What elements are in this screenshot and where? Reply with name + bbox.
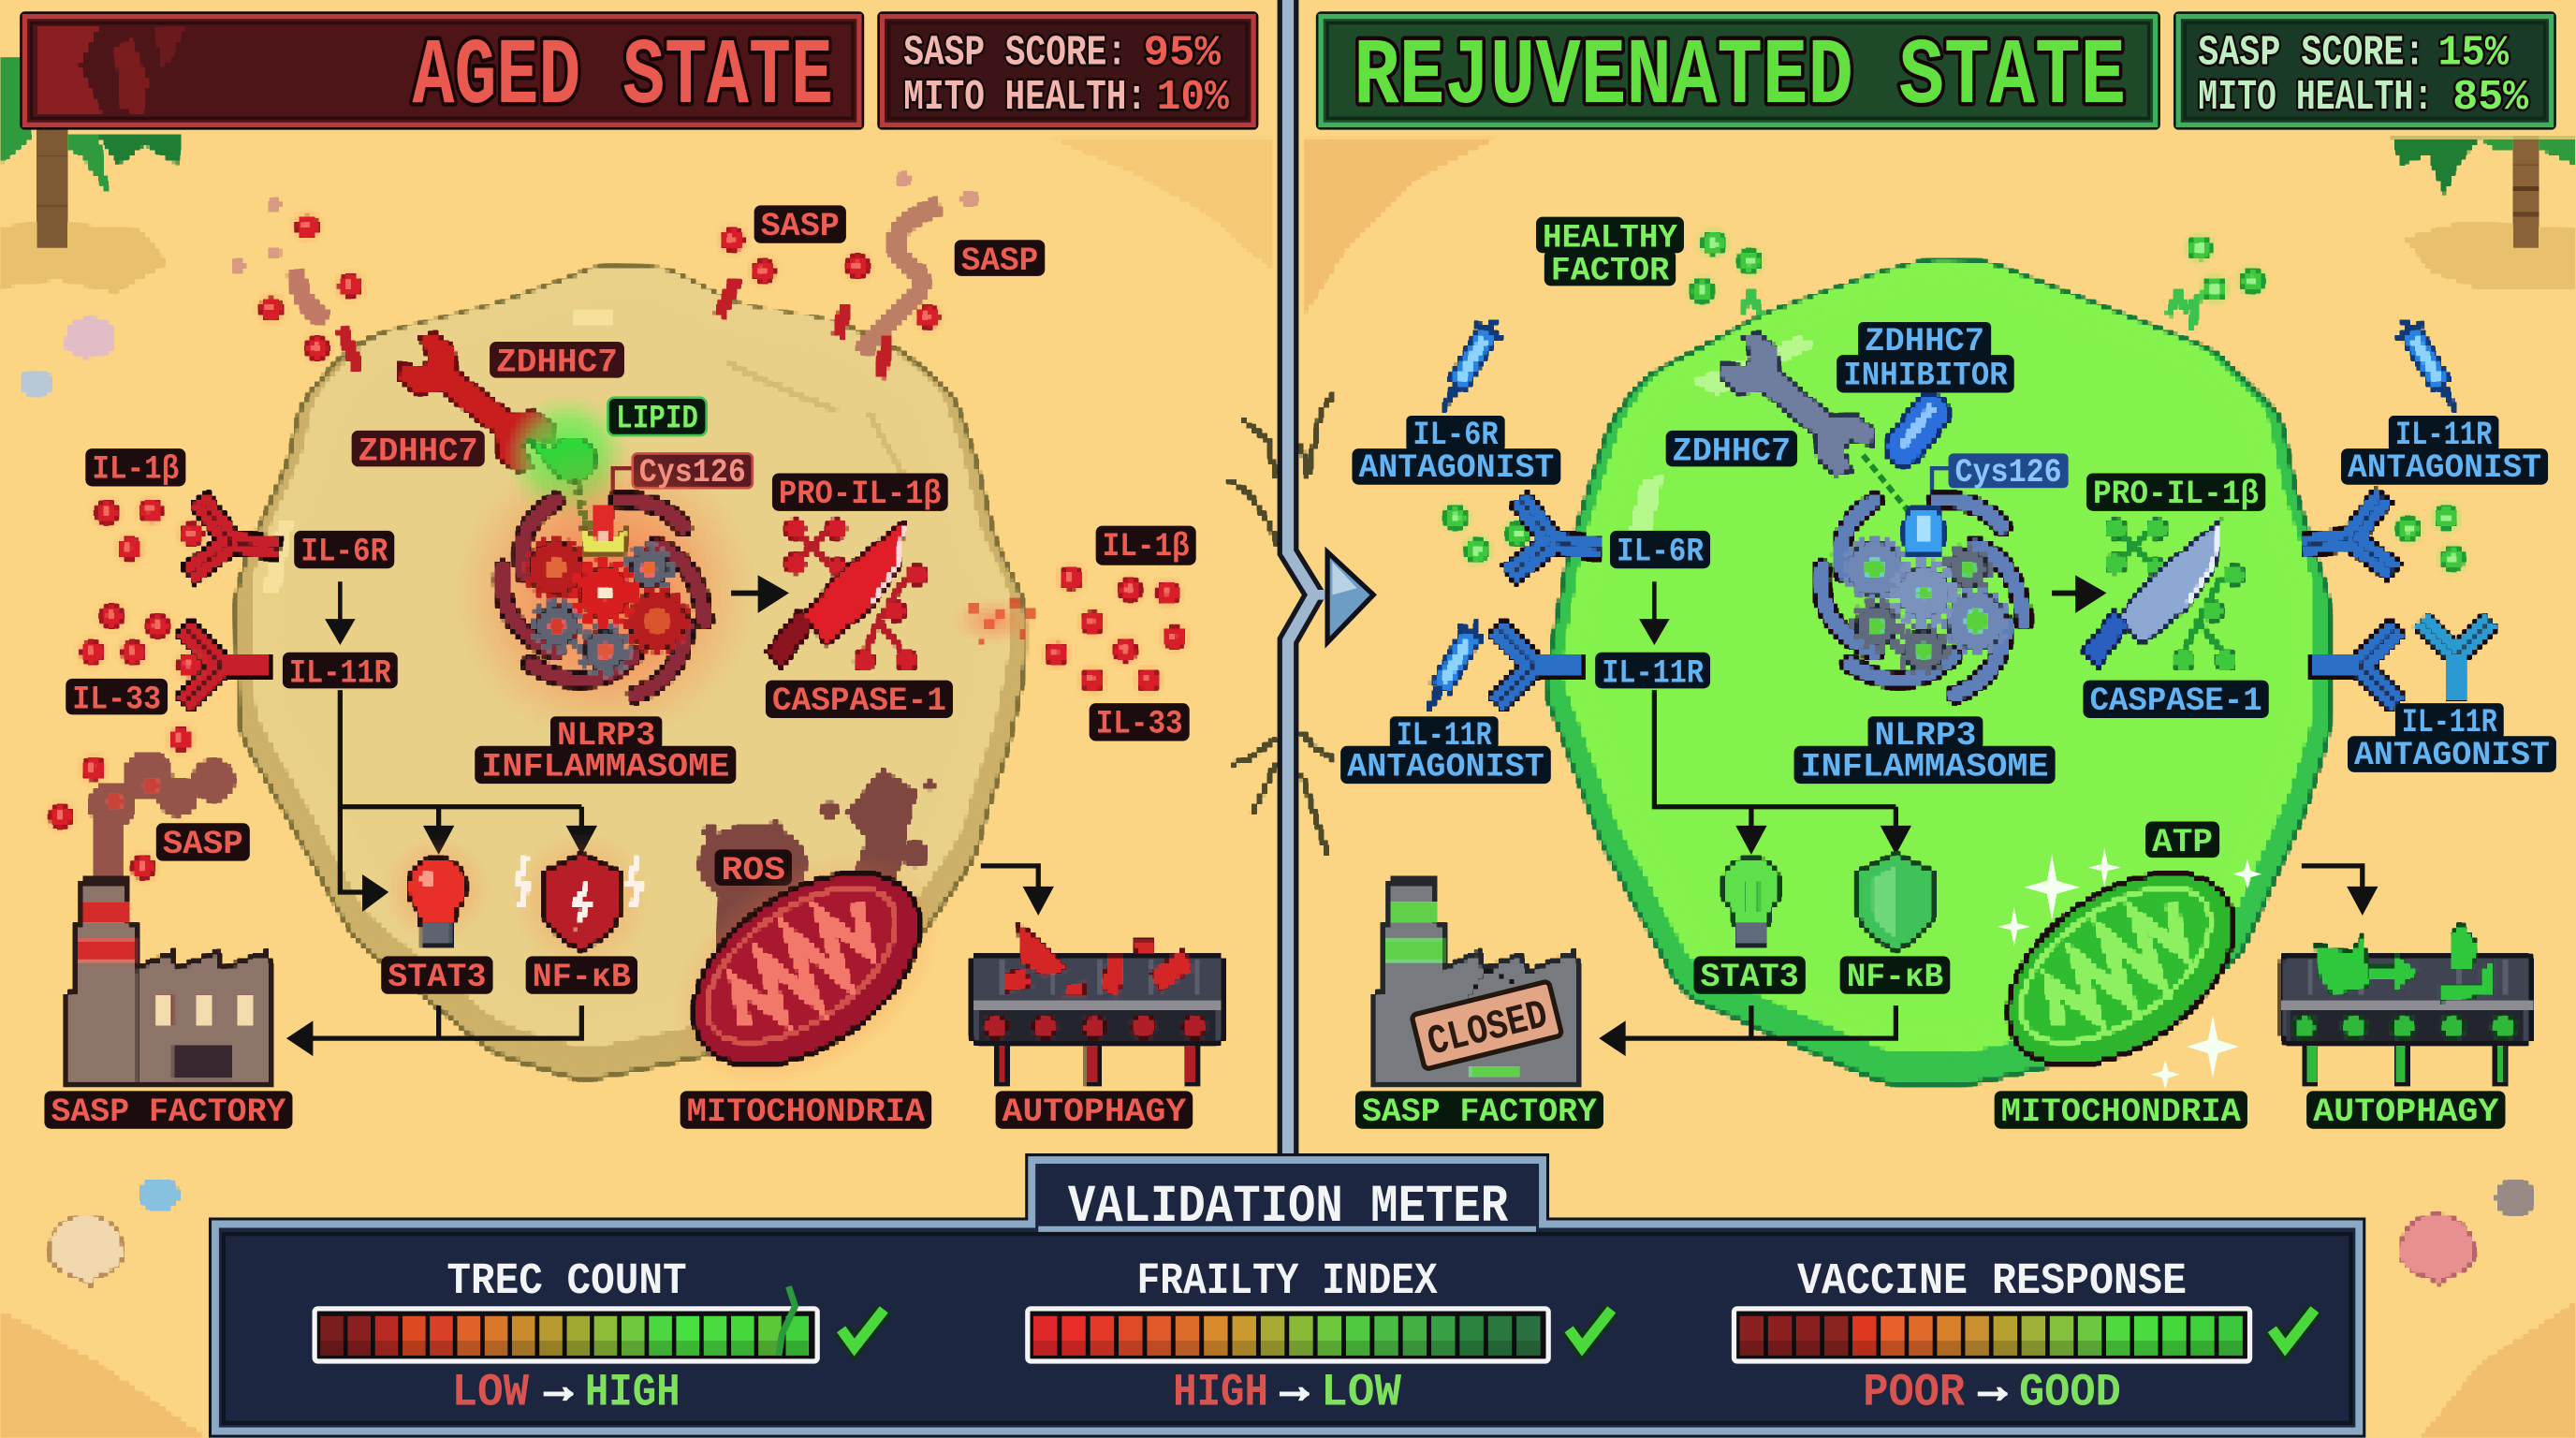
- meter: vaccine response: [1734, 1257, 2315, 1419]
- healthy factor particles: [1684, 225, 2271, 309]
- label: ZDHHC7: ZDHHC7: [359, 433, 478, 470]
- meter: vaccine response: GOOD: [2019, 1367, 2121, 1419]
- icon: ZDHHC7 wrench: [392, 328, 560, 477]
- icon: IL-11R receptor: [171, 626, 271, 705]
- label: NF-κB: NF-κB: [1847, 959, 1943, 996]
- ROS smoke: [698, 769, 935, 961]
- label: ROS: ROS: [722, 852, 785, 889]
- label: NLRP3 INFLAMMASOME: NLRP3: [557, 717, 655, 755]
- icon: closed SASP factory: [1375, 877, 1579, 1083]
- label: STAT3: STAT3: [388, 959, 487, 996]
- label: IL-11R ANTAGONIST: [2348, 703, 2556, 774]
- label: IL-6R ANTAGONIST: [1352, 416, 1560, 487]
- particles: IL-1β left: [89, 493, 169, 566]
- label: Cys126: Cys126: [639, 454, 746, 492]
- label: IL-1β: IL-1β: [1103, 528, 1190, 565]
- label: ZDHHC7: ZDHHC7: [1673, 433, 1791, 470]
- label: IL-6R ANTAGONIST: IL-6R: [1412, 417, 1499, 454]
- label: IL-11R ANTAGONIST: IL-11R: [2395, 417, 2493, 454]
- label: IL-11R ANTAGONIST: IL-11R: [2402, 704, 2497, 741]
- IL-1β and SASP particles at top: [232, 172, 977, 378]
- stats: aged state: 95%: [1144, 28, 1222, 77]
- label: AUTOPHAGY: AUTOPHAGY: [2313, 1093, 2498, 1131]
- icon: NLRP3 inflammasome: [453, 442, 755, 744]
- label: ZDHHC7 INHIBITOR: INHIBITOR: [1843, 358, 2009, 395]
- icon: grey wrench: [1714, 328, 1881, 480]
- header: rejuvenated state: [1316, 11, 2160, 131]
- icon: IL-6R receptor: [1508, 498, 1607, 588]
- icon: receptor right: [2297, 494, 2395, 585]
- icon: caspase-1 knife and intact pro-IL-1β: [2083, 520, 2244, 670]
- icon: NF-κB shield: [1858, 855, 1934, 949]
- label: SASP: SASP: [961, 242, 1038, 280]
- meter: TREC count: LOW: [452, 1367, 530, 1419]
- meter: frailty index: LOW: [1321, 1367, 1402, 1419]
- label: NLRP3 INFLAMMASOME: [1794, 716, 2056, 785]
- label: IL-11R ANTAGONIST: ANTAGONIST: [2354, 737, 2550, 774]
- stats: rejuvenated state: 85%: [2452, 73, 2529, 122]
- meter: frailty index: FRAILTY INDEX: [1137, 1257, 1438, 1307]
- SASP smoke: [43, 721, 235, 886]
- stats: rejuvenated state: MITO HEALTH:: [2198, 73, 2433, 122]
- meter: frailty index: [1028, 1257, 1612, 1419]
- label: NLRP3 INFLAMMASOME: NLRP3: [1875, 717, 1976, 755]
- label: NLRP3 INFLAMMASOME: INFLAMMASOME: [481, 748, 729, 785]
- label: MITOCHONDRIA: MITOCHONDRIA: [687, 1093, 926, 1131]
- meter: TREC count: →: [545, 1363, 573, 1416]
- label: MITOCHONDRIA: MITOCHONDRIA: [2001, 1093, 2242, 1131]
- icon: syringe: [1413, 614, 1491, 721]
- autophagy arrow: [2302, 866, 2374, 910]
- icon: free antibody: [2421, 620, 2492, 700]
- stats: rejuvenated state: 15%: [2438, 28, 2510, 77]
- icon: NF-κB shield: [513, 831, 651, 969]
- label: Cys126: Cys126: [1955, 454, 2062, 492]
- label: IL-6R: IL-6R: [300, 533, 388, 570]
- panel: aged state: [43, 172, 1222, 1135]
- particles: right cluster: [951, 560, 1193, 698]
- healthy particles right: [2391, 500, 2471, 577]
- icon: NLRP3 inflammasome (inhibited): [1822, 500, 2024, 695]
- panel: validation meter: [215, 1160, 2359, 1431]
- label: ATP: ATP: [2152, 824, 2213, 861]
- label: HEALTHY FACTOR: FACTOR: [1551, 252, 1670, 289]
- stats: rejuvenated state: SASP SCORE:: [2198, 28, 2424, 77]
- sparkles: [1998, 848, 2262, 1090]
- title: AGED STATE: [413, 25, 833, 131]
- label: CASPASE-1: CASPASE-1: [2089, 682, 2262, 720]
- arrow: [731, 580, 783, 608]
- meter: frailty index: →: [1281, 1363, 1309, 1416]
- label: IL-11R: IL-11R: [1602, 654, 1705, 692]
- icon: autophagy conveyor: [2282, 923, 2532, 1084]
- label: IL-11R ANTAGONIST: ANTAGONIST: [1347, 748, 1544, 785]
- meter: vaccine response: VACCINE RESPONSE: [1797, 1257, 2187, 1307]
- meter: TREC count: HIGH: [585, 1367, 681, 1419]
- icon: IL-11R receptor: [1495, 626, 1584, 705]
- stats: aged state: 10%: [1157, 73, 1229, 122]
- icon: STAT3 bulb: [1722, 858, 1780, 945]
- label: Cys126: [1932, 453, 2069, 513]
- icon: STAT3 bulb: [385, 836, 490, 945]
- particles: IL-33 left: [74, 598, 176, 670]
- shells and pebbles: [20, 317, 2535, 1284]
- icon: syringe: [1429, 313, 1508, 418]
- icon: receptor right lower: [2310, 626, 2398, 705]
- header: aged state: [20, 11, 864, 131]
- icon: syringe: [2391, 313, 2469, 418]
- rejuvenated cell: [1543, 258, 2331, 1086]
- label: SASP: SASP: [163, 826, 243, 863]
- label: IL-11R: IL-11R: [289, 654, 392, 692]
- panel: rejuvenated state: [1340, 217, 2556, 1131]
- label: NLRP3 INFLAMMASOME: INFLAMMASOME: [1801, 748, 2049, 785]
- label: AUTOPHAGY: AUTOPHAGY: [1003, 1093, 1186, 1131]
- stats: aged state: [877, 11, 1258, 130]
- arrow: [2052, 580, 2101, 608]
- label: NLRP3 INFLAMMASOME: [475, 716, 736, 785]
- dotted line: [1863, 455, 1912, 516]
- label: Cys126: [613, 453, 753, 520]
- label: IL-33: IL-33: [72, 681, 161, 718]
- label: SASP FACTORY: SASP FACTORY: [1362, 1093, 1597, 1131]
- label: HEALTHY FACTOR: [1536, 217, 1684, 289]
- label: ZDHHC7 INHIBITOR: ZDHHC7: [1865, 323, 1984, 360]
- meter: TREC count: [315, 1257, 884, 1419]
- icon: lipid: [505, 394, 629, 534]
- stats: aged state: MITO HEALTH:: [903, 73, 1147, 122]
- label: IL-11R ANTAGONIST: ANTAGONIST: [2348, 449, 2541, 487]
- label: PRO-IL-1β: PRO-IL-1β: [2093, 476, 2259, 513]
- label: STAT3: STAT3: [1701, 959, 1799, 996]
- icon: inhibitor pill: [1879, 389, 1955, 473]
- stats: rejuvenated state: [2174, 11, 2556, 130]
- palm tree left: [0, 59, 181, 292]
- icon: mitochondria: [629, 804, 985, 1135]
- label: ZDHHC7 INHIBITOR: [1837, 322, 2014, 395]
- label: CASPASE-1: CASPASE-1: [772, 682, 946, 720]
- stats: aged state: SASP SCORE:: [903, 28, 1127, 77]
- label: HEALTHY FACTOR: HEALTHY: [1543, 219, 1677, 257]
- meter: frailty index: HIGH: [1173, 1367, 1268, 1419]
- label: PRO-IL-1β: PRO-IL-1β: [779, 476, 942, 513]
- aged cell: [233, 265, 1027, 1083]
- icon: IL-6R receptor: [174, 498, 286, 588]
- meter: vaccine response: POOR: [1863, 1367, 1966, 1419]
- label: IL-1β: IL-1β: [92, 451, 179, 489]
- label: SASP FACTORY: SASP FACTORY: [51, 1093, 285, 1131]
- pathway arrows: [1603, 690, 1908, 1051]
- icon: SASP factory: [67, 877, 271, 1083]
- icon: mitochondria: [1974, 835, 2268, 1104]
- autophagy arrow: [981, 866, 1050, 910]
- label: IL-11R ANTAGONIST: IL-11R: [1397, 717, 1492, 755]
- label: IL-11R ANTAGONIST: [2341, 416, 2548, 487]
- label: LIPID: LIPID: [616, 400, 698, 437]
- pathway arrows: [291, 690, 593, 1051]
- icon: autophagy conveyor: [973, 925, 1222, 1084]
- label: ZDHHC7: ZDHHC7: [496, 345, 618, 382]
- cracks near divider: [1229, 394, 1334, 855]
- healthy particles left: [1438, 500, 1536, 568]
- meter: TREC count: TREC COUNT: [446, 1257, 687, 1307]
- central divider with transition arrow: [1288, 0, 1373, 1170]
- title: REJUVENATED STATE: [1354, 25, 2126, 131]
- label: NF-κB: NF-κB: [533, 959, 631, 996]
- label: IL-33: IL-33: [1096, 706, 1183, 743]
- palm tree right: [2392, 138, 2576, 289]
- arrow: [1643, 581, 1666, 640]
- icon: closed SASP factory: CLOSED: [1423, 992, 1553, 1067]
- meter: vaccine response: →: [1979, 1363, 2007, 1416]
- label: IL-11R ANTAGONIST: [1340, 716, 1551, 785]
- panel title: VALIDATION METER: [1068, 1177, 1508, 1237]
- label: IL-6R: IL-6R: [1617, 533, 1705, 570]
- icon: caspase-1 knife and pro-IL-1β: [768, 520, 927, 670]
- label: SASP: SASP: [761, 208, 840, 245]
- arrow: [329, 581, 352, 640]
- label: IL-6R ANTAGONIST: ANTAGONIST: [1358, 449, 1554, 487]
